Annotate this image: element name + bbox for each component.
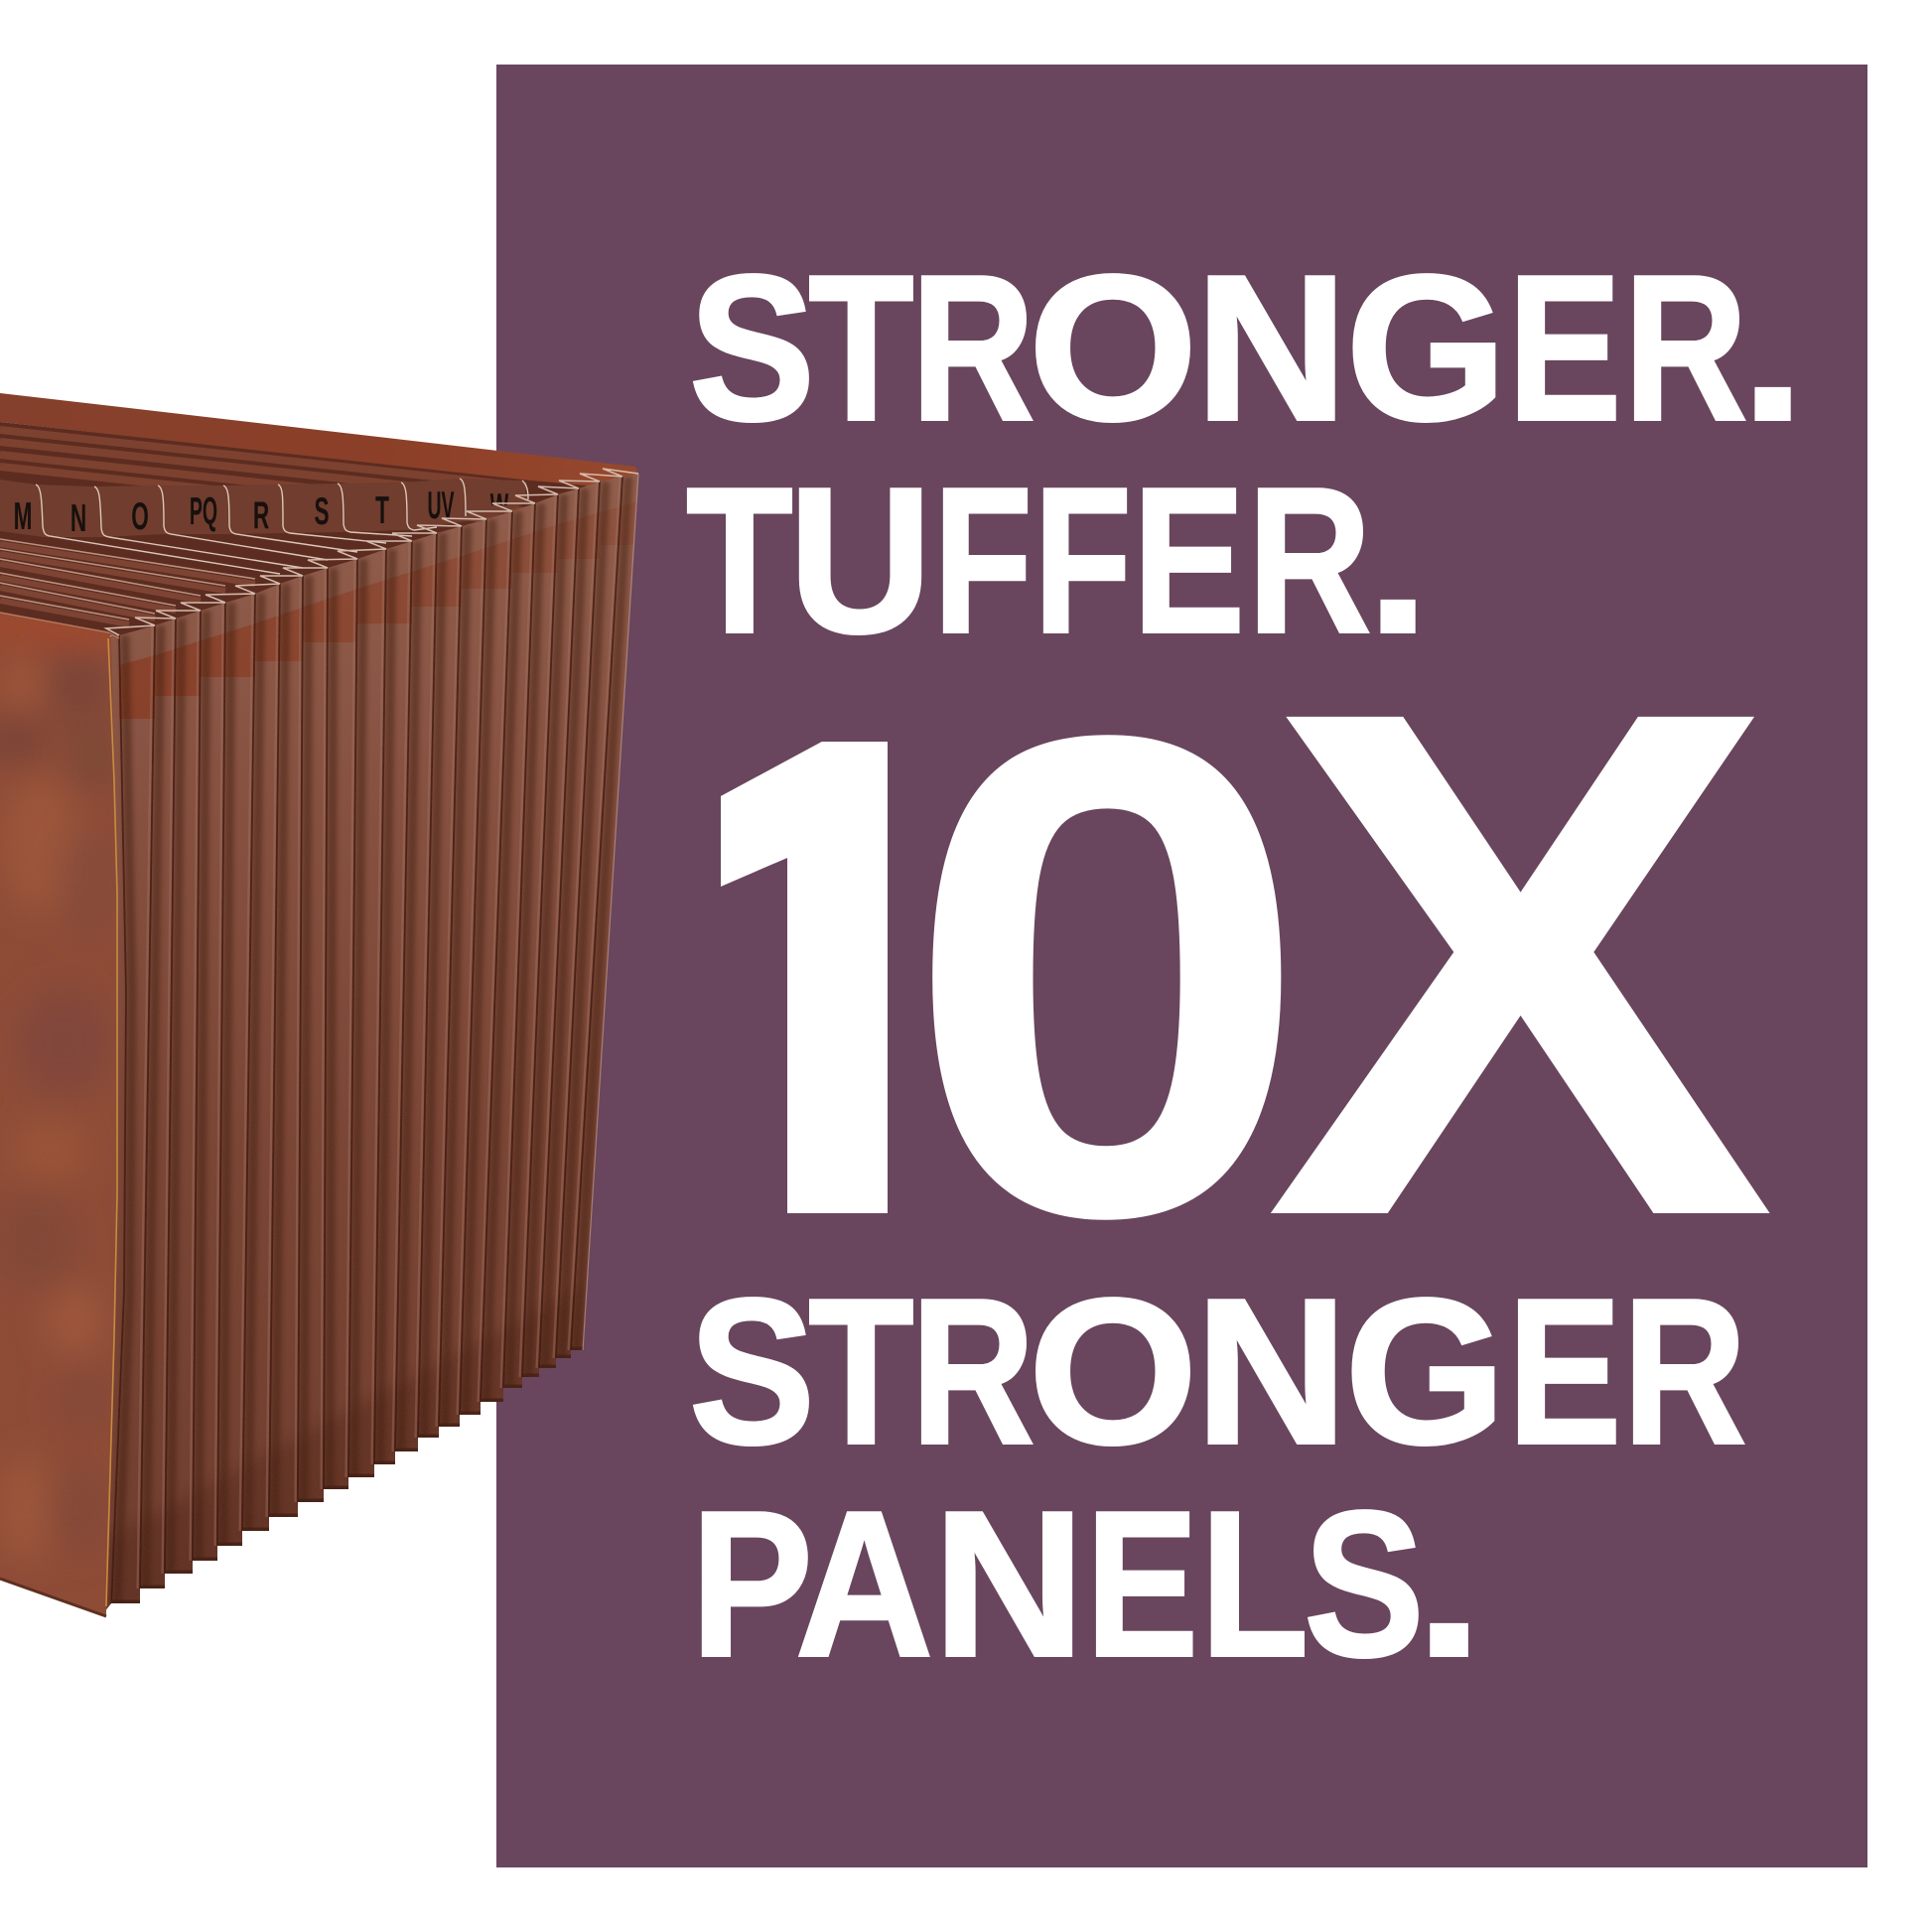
heading: STRONGER: E (1508, 1257, 1621, 1487)
heading: PANELS.: E (1086, 1469, 1198, 1700)
pleat top zigzag folds (106, 469, 638, 635)
pleat bottom shadows (111, 1349, 583, 1602)
tab letters: N (70, 496, 86, 540)
tab letters (15, 491, 508, 532)
big number: 10X: 1 (583, 593, 1039, 1359)
tab letters: UV (427, 483, 455, 527)
front cover (0, 612, 119, 1618)
folder back panel (0, 393, 638, 488)
heading: PANELS.: S (1304, 1469, 1425, 1700)
heading: PANELS.: . (1415, 1469, 1483, 1700)
heading: STRONGER: G (1344, 1257, 1506, 1487)
pleat edge highlights (138, 477, 621, 1588)
reinforced band (119, 501, 638, 719)
heading: STRONGER: N (1195, 1257, 1348, 1487)
heading: STRONGER.: S (689, 232, 815, 465)
heading: STRONGER: T (808, 1257, 913, 1487)
heading: STRONGER: O (1029, 1257, 1198, 1487)
heading: STRONGER: R (911, 1257, 1035, 1487)
pleat soft shadows (117, 477, 628, 1608)
heading: PANELS.: A (795, 1469, 933, 1700)
heading: STRONGER: R (1623, 1257, 1746, 1487)
pleat right outer edge (583, 474, 638, 1350)
heading: TUFFER.: F (1034, 445, 1132, 677)
tab letters: T (375, 488, 389, 532)
heading: STRONGER.: N (1195, 232, 1348, 465)
paper grain (94, 467, 645, 1618)
panel: purple text panel (496, 65, 1867, 1867)
heading: TUFFER.: T (686, 445, 793, 677)
heading: STRONGER.: R (911, 232, 1035, 465)
heading: STRONGER.: R (1624, 232, 1747, 465)
heading: STRONGER.: T (808, 232, 913, 465)
heading: STRONGER.: E (1508, 232, 1621, 465)
heading: STRONGER.: O (1029, 232, 1198, 465)
big number: 10X (583, 561, 1780, 1367)
heading: TUFFER.: F (933, 445, 1033, 677)
inner divider layers behind tabs (0, 430, 526, 523)
heading: TUFFER.: E (1133, 445, 1245, 677)
heading: TUFFER.: R (1248, 445, 1371, 677)
glossy bottom edge (104, 1287, 583, 1628)
heading: STRONGER.: . (1740, 232, 1805, 465)
heading: TUFFER.: U (788, 445, 932, 677)
big number: 10X: 0 (903, 594, 1311, 1359)
big number: 10X: X (1264, 561, 1780, 1367)
heading: TUFFER.: . (1367, 445, 1430, 677)
index tabs row (0, 479, 528, 537)
heading: STRONGER: S (689, 1257, 815, 1487)
accordion pleats (94, 467, 645, 1628)
tab letters: O (131, 494, 149, 538)
tab letters: M (14, 494, 32, 538)
heading: PANELS.: L (1200, 1469, 1309, 1700)
tab letters: W (490, 485, 509, 529)
heading: PANELS.: N (933, 1469, 1085, 1700)
tab letters: PQ (190, 489, 217, 533)
pleat gutters (111, 477, 622, 1608)
heading: STRONGER.: G (1345, 232, 1507, 465)
tab edges (36, 479, 528, 574)
lower divider layers (0, 539, 255, 624)
illustration: expanding file folder (0, 393, 645, 1628)
tab letters: S (314, 489, 330, 533)
tab letters: R (253, 493, 269, 537)
folder interior (0, 422, 638, 637)
heading: PANELS.: P (691, 1469, 813, 1700)
